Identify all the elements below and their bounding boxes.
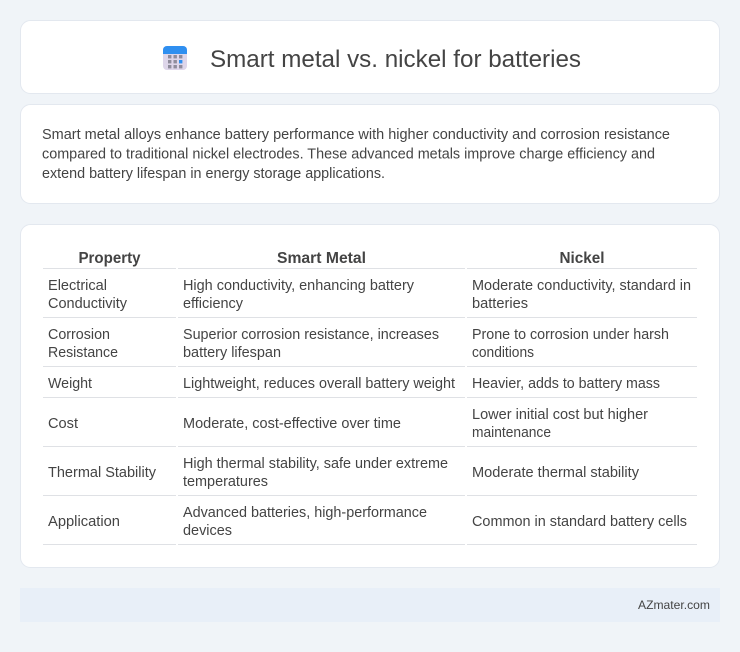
table header: Property xyxy=(78,250,141,267)
row: cost: Cost xyxy=(48,416,78,432)
footer bar xyxy=(20,588,720,622)
row: electrical conductivity: batteries xyxy=(472,296,528,312)
row: cost: Lower initial cost but higher xyxy=(472,407,648,423)
row: cost: Moderate, cost-effective over time xyxy=(183,416,401,432)
row: application: Common in standard battery cells xyxy=(472,514,687,530)
footer credit: AZmater.com xyxy=(638,598,710,612)
row: electrical conductivity: High conductivity, enhancing battery xyxy=(183,278,415,294)
text block: introduction: extend battery lifespan in energy storage applications. xyxy=(42,166,385,182)
row: electrical conductivity: Moderate conductivity, standard in xyxy=(472,278,691,294)
row: weight xyxy=(48,376,660,392)
row: application: Advanced batteries, high-performance xyxy=(183,505,427,521)
row: electrical conductivity: Electrical xyxy=(48,278,107,294)
text block: introduction xyxy=(42,127,670,182)
row: thermal stability: temperatures xyxy=(183,474,268,490)
row: weight: Heavier, adds to battery mass xyxy=(472,376,660,392)
panel: introduction xyxy=(20,104,720,204)
row: corrosion resistance: Corrosion xyxy=(48,327,110,343)
table header xyxy=(78,250,604,267)
row: thermal stability: Thermal Stability xyxy=(48,465,157,481)
row: corrosion resistance: Superior corrosion resistance, increases xyxy=(183,327,439,343)
text block: introduction: Smart metal alloys enhance battery performance with higher conductivity and corrosion resistance xyxy=(42,127,670,143)
row: corrosion resistance: Prone to corrosion under harsh xyxy=(472,327,669,343)
row: electrical conductivity: efficiency xyxy=(183,296,244,312)
row: corrosion resistance xyxy=(48,327,669,361)
panel: title card xyxy=(20,20,720,94)
row: corrosion resistance: conditions xyxy=(472,345,534,361)
row: cost xyxy=(48,407,648,441)
row: application: devices xyxy=(183,523,232,539)
row: cost: maintenance xyxy=(472,425,551,441)
table header: Smart Metal xyxy=(277,250,366,267)
row: corrosion resistance: Resistance xyxy=(48,345,118,361)
row: thermal stability xyxy=(48,456,640,490)
icon: calendar xyxy=(163,46,187,70)
row: electrical conductivity: Conductivity xyxy=(48,296,128,312)
row: weight: Weight xyxy=(48,376,92,392)
row: application xyxy=(48,505,687,539)
row: application: Application xyxy=(48,514,120,530)
row: electrical conductivity xyxy=(48,278,691,312)
row: thermal stability: High thermal stability, safe under extreme xyxy=(183,456,448,472)
table header: Nickel xyxy=(560,250,604,267)
row: corrosion resistance: battery lifespan xyxy=(183,345,281,361)
row: weight: Lightweight, reduces overall battery weight xyxy=(183,376,455,392)
text block: introduction: compared to traditional nickel electrodes. These advanced metals improve charge efficiency and xyxy=(42,146,655,162)
row: thermal stability: Moderate thermal stability xyxy=(472,465,640,481)
panel: comparison table xyxy=(20,224,720,568)
title: Smart metal vs. nickel for batteries xyxy=(210,46,581,73)
